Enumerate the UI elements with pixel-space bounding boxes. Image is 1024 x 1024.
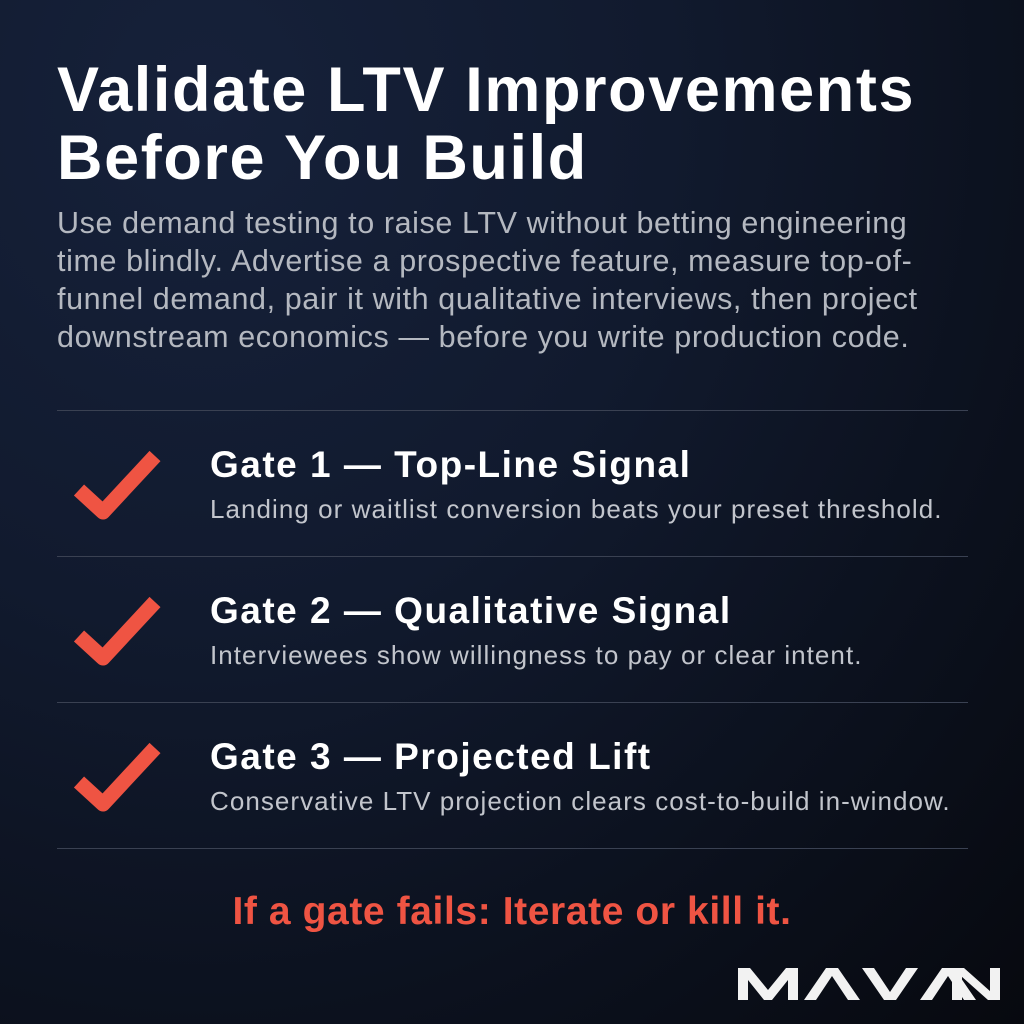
title: Validate LTV Improvements <box>57 55 915 125</box>
icon: check <box>74 596 160 666</box>
gate 1 <box>74 444 943 524</box>
logo <box>738 968 1000 1000</box>
subtitle: time blindly. Advertise a prospective feature, measure top-of- <box>57 244 912 278</box>
gate 3 <box>74 736 951 816</box>
gate 1 text: Landing or waitlist conversion beats your preset threshold. <box>210 494 943 524</box>
bottom callout: If a gate fails: Iterate or kill it. <box>232 890 792 933</box>
title: Before You Build <box>57 123 588 193</box>
subtitle: downstream economics — before you write production code. <box>57 320 909 354</box>
gate 3 title: Gate 3 — Projected Lift <box>210 736 652 777</box>
icon: check <box>74 742 160 812</box>
title <box>57 55 915 193</box>
icon: check <box>74 450 160 520</box>
gate 1 title: Gate 1 — Top-Line Signal <box>210 444 691 485</box>
subtitle: Use demand testing to raise LTV without betting engineering <box>57 206 907 240</box>
gate 3 text: Conservative LTV projection clears cost-to-build in-window. <box>210 786 951 816</box>
gate 2 <box>74 590 862 670</box>
subtitle <box>57 206 918 354</box>
subtitle: funnel demand, pair it with qualitative interviews, then project <box>57 282 918 316</box>
gate 2 title: Gate 2 — Qualitative Signal <box>210 590 732 631</box>
gate 2 text: Interviewees show willingness to pay or clear intent. <box>210 640 862 670</box>
